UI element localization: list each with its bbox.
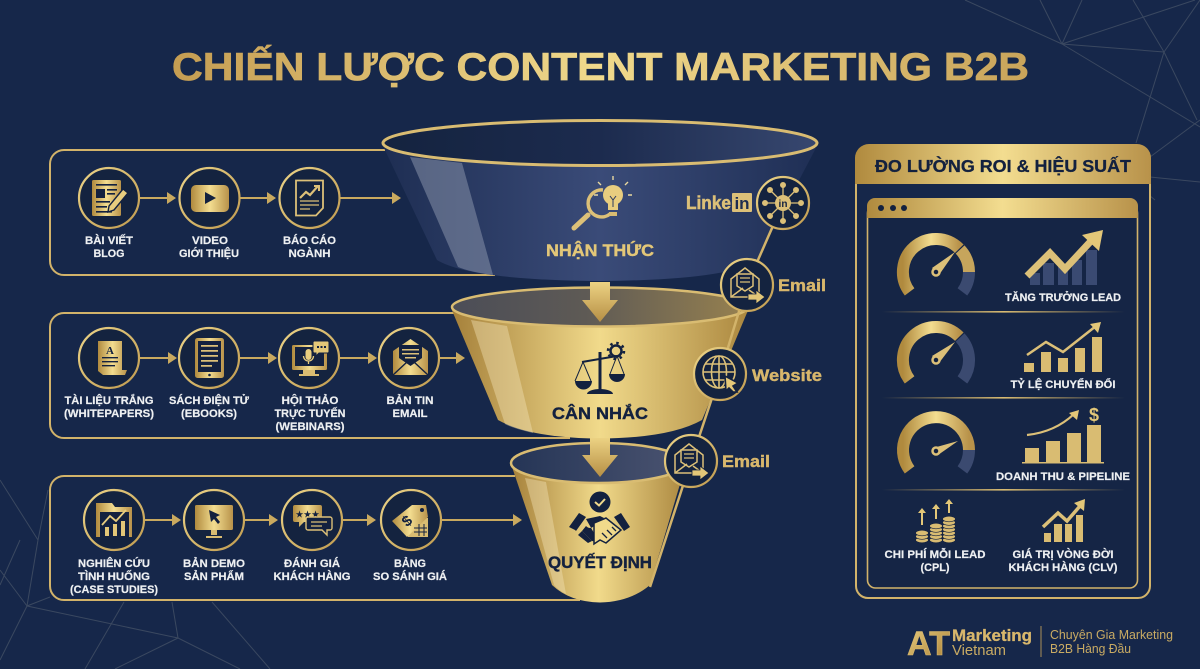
label [373,557,447,583]
label: BÁO CÁO [283,234,336,247]
label: GIÁ TRỊ VÒNG ĐỜI [1012,548,1114,561]
logo: AT [907,625,950,663]
arrow: row 2 flow [139,352,465,364]
node: industry report [280,168,340,260]
arrow: row 3 flow [144,514,522,526]
funnel stage: awareness [383,120,817,281]
node: intro video [179,168,240,260]
label [884,548,986,574]
icon: handshake with check [569,492,630,544]
label: Website [752,366,822,385]
icon: scroll: A [106,345,114,357]
channel: Email (upper) [721,259,826,311]
label: DOANH THU & PIPELINE [996,471,1130,483]
label: EMAIL [392,408,428,420]
icon: monitor with cursor [195,505,233,538]
funnel stage: consideration [451,288,749,438]
node: webinars [274,328,346,433]
arrow: consideration to decision [582,438,618,477]
metric: revenue and pipeline: $ [1089,405,1099,425]
dashboard window [867,198,1138,588]
logo [907,625,1173,663]
icon: globe with cursor [703,356,738,392]
panel: decision content row [50,476,580,600]
label: (CASE STUDIES) [70,584,158,596]
icon: folder chart [96,503,132,537]
node: customer reviews [274,490,350,583]
label: CHI PHÍ MỖI LEAD [884,548,986,561]
label [70,557,158,596]
node: price comparison [373,490,447,583]
icon: review bubbles: ★★★ [296,510,320,519]
tagline [1050,628,1173,656]
icon: video play [191,185,229,212]
tagline: Chuyên Gia Marketing [1050,628,1173,642]
label: (WEBINARS) [276,421,345,433]
icon: report [296,180,323,216]
label: TỶ LỆ CHUYỂN ĐỔI [1010,378,1116,391]
node: blog post [79,168,139,260]
icon: open envelope [393,339,428,375]
label: BLOG [94,248,124,260]
metric: customer lifetime value [1008,499,1118,574]
label: Email [778,276,826,295]
label: BẢN TIN [386,394,434,407]
label: (CPL) [920,562,950,574]
channel: Website [694,348,822,400]
icon: webinar monitor [292,341,329,376]
label: Linkedin wordmark: Linke [686,193,731,213]
icon: tablet [195,338,224,378]
icon: network: in [779,199,787,210]
channel: Email (lower) [665,435,770,487]
label: BẢNG [394,557,426,570]
icon: document with pencil [92,180,128,216]
label: VIDEO [192,235,228,247]
label: SÁCH ĐIỆN TỬ [169,394,250,407]
label: NGÀNH [288,247,331,260]
label [169,394,250,420]
label [183,557,245,583]
arrow: awareness to consideration [582,282,618,322]
label: TÀI LIỆU TRẮNG [64,394,154,407]
title: CHIẾN LƯỢC CONTENT MARKETING B2B [172,45,1029,89]
label [179,235,239,260]
label [64,394,154,420]
funnel stage: decision [511,443,686,602]
logo: Vietnam [952,643,1006,659]
panel: consideration content row [50,313,570,438]
panel: awareness content row [50,150,495,275]
channel connector line [650,203,783,587]
channel: LinkedIn [686,177,809,229]
label: HỘI THẢO [282,394,339,407]
gauge 2 [903,327,969,380]
label: KHÁCH HÀNG (CLV) [1008,561,1118,574]
label: NGHIÊN CỨU [78,557,150,570]
label: SẢN PHẨM [184,570,244,583]
icon: envelope with arrow [675,444,709,480]
arrow: row 1 flow [139,192,401,204]
metric: cost per lead [884,499,986,574]
gauge 3 [903,417,969,470]
label: Email [722,452,770,471]
label [283,234,336,260]
icon: price tag: $ [399,512,416,531]
label: ĐÁNH GIÁ [284,557,340,570]
icon: magnifier and bulb [574,176,632,228]
metric: conversion rate [1010,322,1116,391]
node: email newsletter [379,328,439,420]
label: decision: QUYẾT ĐỊNH [548,553,652,572]
metric: revenue and pipeline [996,405,1130,483]
label [85,234,133,260]
label: BÀI VIẾT [85,234,133,247]
label: KHÁCH HÀNG [274,570,350,583]
label [1008,548,1118,574]
label: awareness: NHẬN THỨC [546,241,654,260]
icon: scale and gear [575,343,625,394]
node: ebooks [169,328,250,420]
label: (EBOOKS) [181,408,237,420]
tagline: B2B Hàng Đầu [1050,642,1131,656]
label [386,394,434,420]
label [274,557,350,583]
metric: lead growth [1005,230,1121,304]
label: BẢN DEMO [183,557,245,570]
panel: ROI measurement [855,144,1151,598]
node: whitepapers [64,328,154,420]
label: consideration: CÂN NHẮC [552,404,648,423]
panel header [855,144,1151,184]
logo: Marketing [952,626,1032,645]
node: case studies [70,490,158,596]
node: product demo [183,490,245,583]
icon: envelope with arrow [731,268,765,304]
label: SO SÁNH GIÁ [373,570,447,583]
label: TRỰC TUYẾN [274,407,346,420]
label: Linkedin wordmark: in [734,194,750,213]
header text: ĐO LƯỜNG ROI & HIỆU SUẤT [875,155,1131,176]
label [274,394,346,433]
label: TÌNH HUỐNG [78,569,150,583]
label: (WHITEPAPERS) [64,408,154,420]
label: GIỚI THIỆU [179,247,239,260]
gauge 1 [903,239,969,292]
label: TĂNG TRƯỞNG LEAD [1005,291,1121,304]
